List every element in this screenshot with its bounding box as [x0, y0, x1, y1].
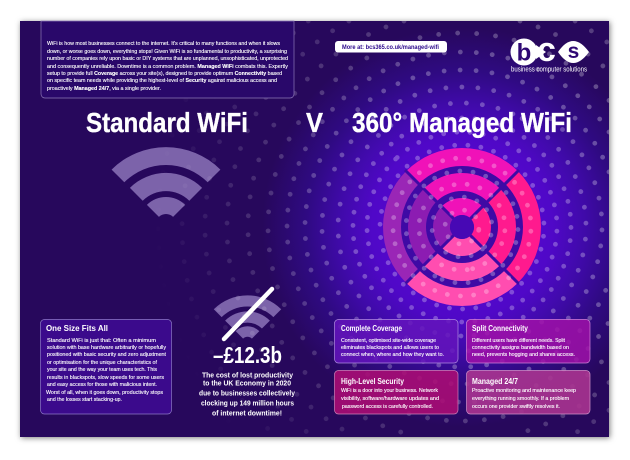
intro text block: setup to provide full Coverage across your site(s), designed to provide optimum Connectivity based — [47, 71, 282, 77]
heading: one size fits all: One Size Fits All — [46, 324, 108, 333]
body text: managed 24/7: occurs one provider swiftly resolves it. — [472, 404, 560, 410]
stat description: clocking up 149 million hours — [201, 398, 294, 408]
link pill — [335, 41, 447, 52]
panel: split connectivity — [466, 320, 590, 363]
body text: managed 24/7: Proactive monitoring and maintenance keep — [472, 388, 576, 394]
panel: intro — [41, 21, 294, 98]
stat description: to the UK Economy in 2020 — [203, 378, 291, 388]
stat: cost of downtime: –£12.3b — [213, 342, 282, 368]
intro text block: and consequently unreliable. Downtime is a common problem. Managed WiFi combats this. Expertly — [47, 64, 288, 70]
heading: 360 managed wifi: 360° Managed WiFi — [352, 107, 572, 138]
body text: one size fits all: or optimisation for the unique characteristics of — [47, 360, 157, 366]
intro text block: number of companies rely upon basic or DIY systems that are unplanned, unsophisticated, unprotected — [47, 56, 288, 62]
body text: one size fits all: results in blackspots, slow speeds for some users — [47, 375, 164, 381]
panel: high-level security — [334, 370, 458, 414]
heading: split connectivity: Split Connectivity — [472, 324, 528, 333]
heading: high-level security: High-Level Security — [341, 377, 404, 386]
body text: split connectivity: need, prevents hogging and shares access. — [472, 352, 575, 358]
body text: one size fits all — [46, 338, 166, 403]
body text: split connectivity: connectivity assigns bandwidth based on — [472, 345, 569, 351]
icon: standard wifi — [112, 147, 220, 217]
link pill: More at: bcs365.co.uk/managed-wifi — [342, 45, 439, 51]
body text: high-level security: WiFi is a door into your business. Network — [341, 388, 438, 394]
body text: complete coverage: connect when, where and how they want to. — [341, 352, 444, 358]
panel: one size fits all — [40, 320, 172, 414]
body text: complete coverage: Consistent, optimised site-wide coverage — [341, 338, 436, 344]
body text: one size fits all: your site and the way your team uses tech. This — [47, 367, 157, 373]
heading: managed 24/7: Managed 24/7 — [472, 377, 518, 386]
body text: split connectivity — [472, 338, 575, 358]
body text: managed 24/7 — [472, 388, 576, 410]
body text: high-level security: password access is carefully controlled. — [342, 404, 433, 410]
body text: one size fits all: Worst of all, when it goes down, productivity stops — [46, 390, 163, 396]
logo: bcs: c — [537, 31, 556, 69]
concentric dot pattern — [180, 21, 609, 434]
stat description: of internet downtime! — [212, 408, 282, 418]
stat description: due to businesses collectively — [199, 388, 296, 398]
intro text block: WiFi is how most businesses connect to the internet. It's critical to many functions and when it slows — [47, 41, 280, 47]
icon: crossed-out wifi — [214, 289, 281, 339]
intro text block: down, or worse goes down, everything stops! Given WiFi is so fundamental to productivity, a surprising — [47, 49, 287, 55]
heading: complete coverage: Complete Coverage — [341, 324, 402, 333]
body text: one size fits all: positioned with basic security and zero adjustment — [47, 352, 166, 358]
heading: versus: V — [306, 107, 323, 138]
body text: one size fits all: Standard WiFi is just that: Often a minimum — [47, 338, 157, 344]
logo: bcs: b — [517, 40, 531, 66]
body text: high-level security: visibility, software/hardware updates and — [341, 396, 439, 402]
stat description — [199, 370, 296, 418]
body text: one size fits all: and easy access for those with malicious intent. — [47, 382, 157, 388]
logo: bcs: business computer solutions — [511, 66, 587, 74]
body text: managed 24/7: everything running smoothly. If a problem — [472, 396, 569, 402]
body text: high-level security — [341, 388, 439, 410]
logo: bcs: s — [568, 40, 579, 63]
intro text block — [47, 41, 288, 92]
heading: standard wifi: Standard WiFi — [86, 107, 248, 138]
body text: complete coverage — [341, 338, 444, 358]
intro text block: on specific team needs while providing the highest-level of Security against malicious access and — [47, 78, 277, 84]
body text: one size fits all: and the losses start stacking-up. — [47, 397, 122, 403]
body text: one size fits all: solution with base hardware arbitrarily or hopefully — [47, 345, 166, 351]
body text: split connectivity: Different users have different needs. Split — [472, 338, 565, 344]
panel: managed 24/7 — [466, 370, 590, 414]
ring target icon: 360 managed wifi — [383, 148, 541, 306]
intro text block: proactively Managed 24/7, via a single provider. — [47, 86, 161, 92]
panel: complete coverage — [334, 320, 458, 363]
logo: bcs — [510, 31, 589, 74]
body text: complete coverage: eliminates blackspots and allows users to — [341, 345, 439, 351]
stat description: The cost of lost productivity — [202, 370, 294, 380]
